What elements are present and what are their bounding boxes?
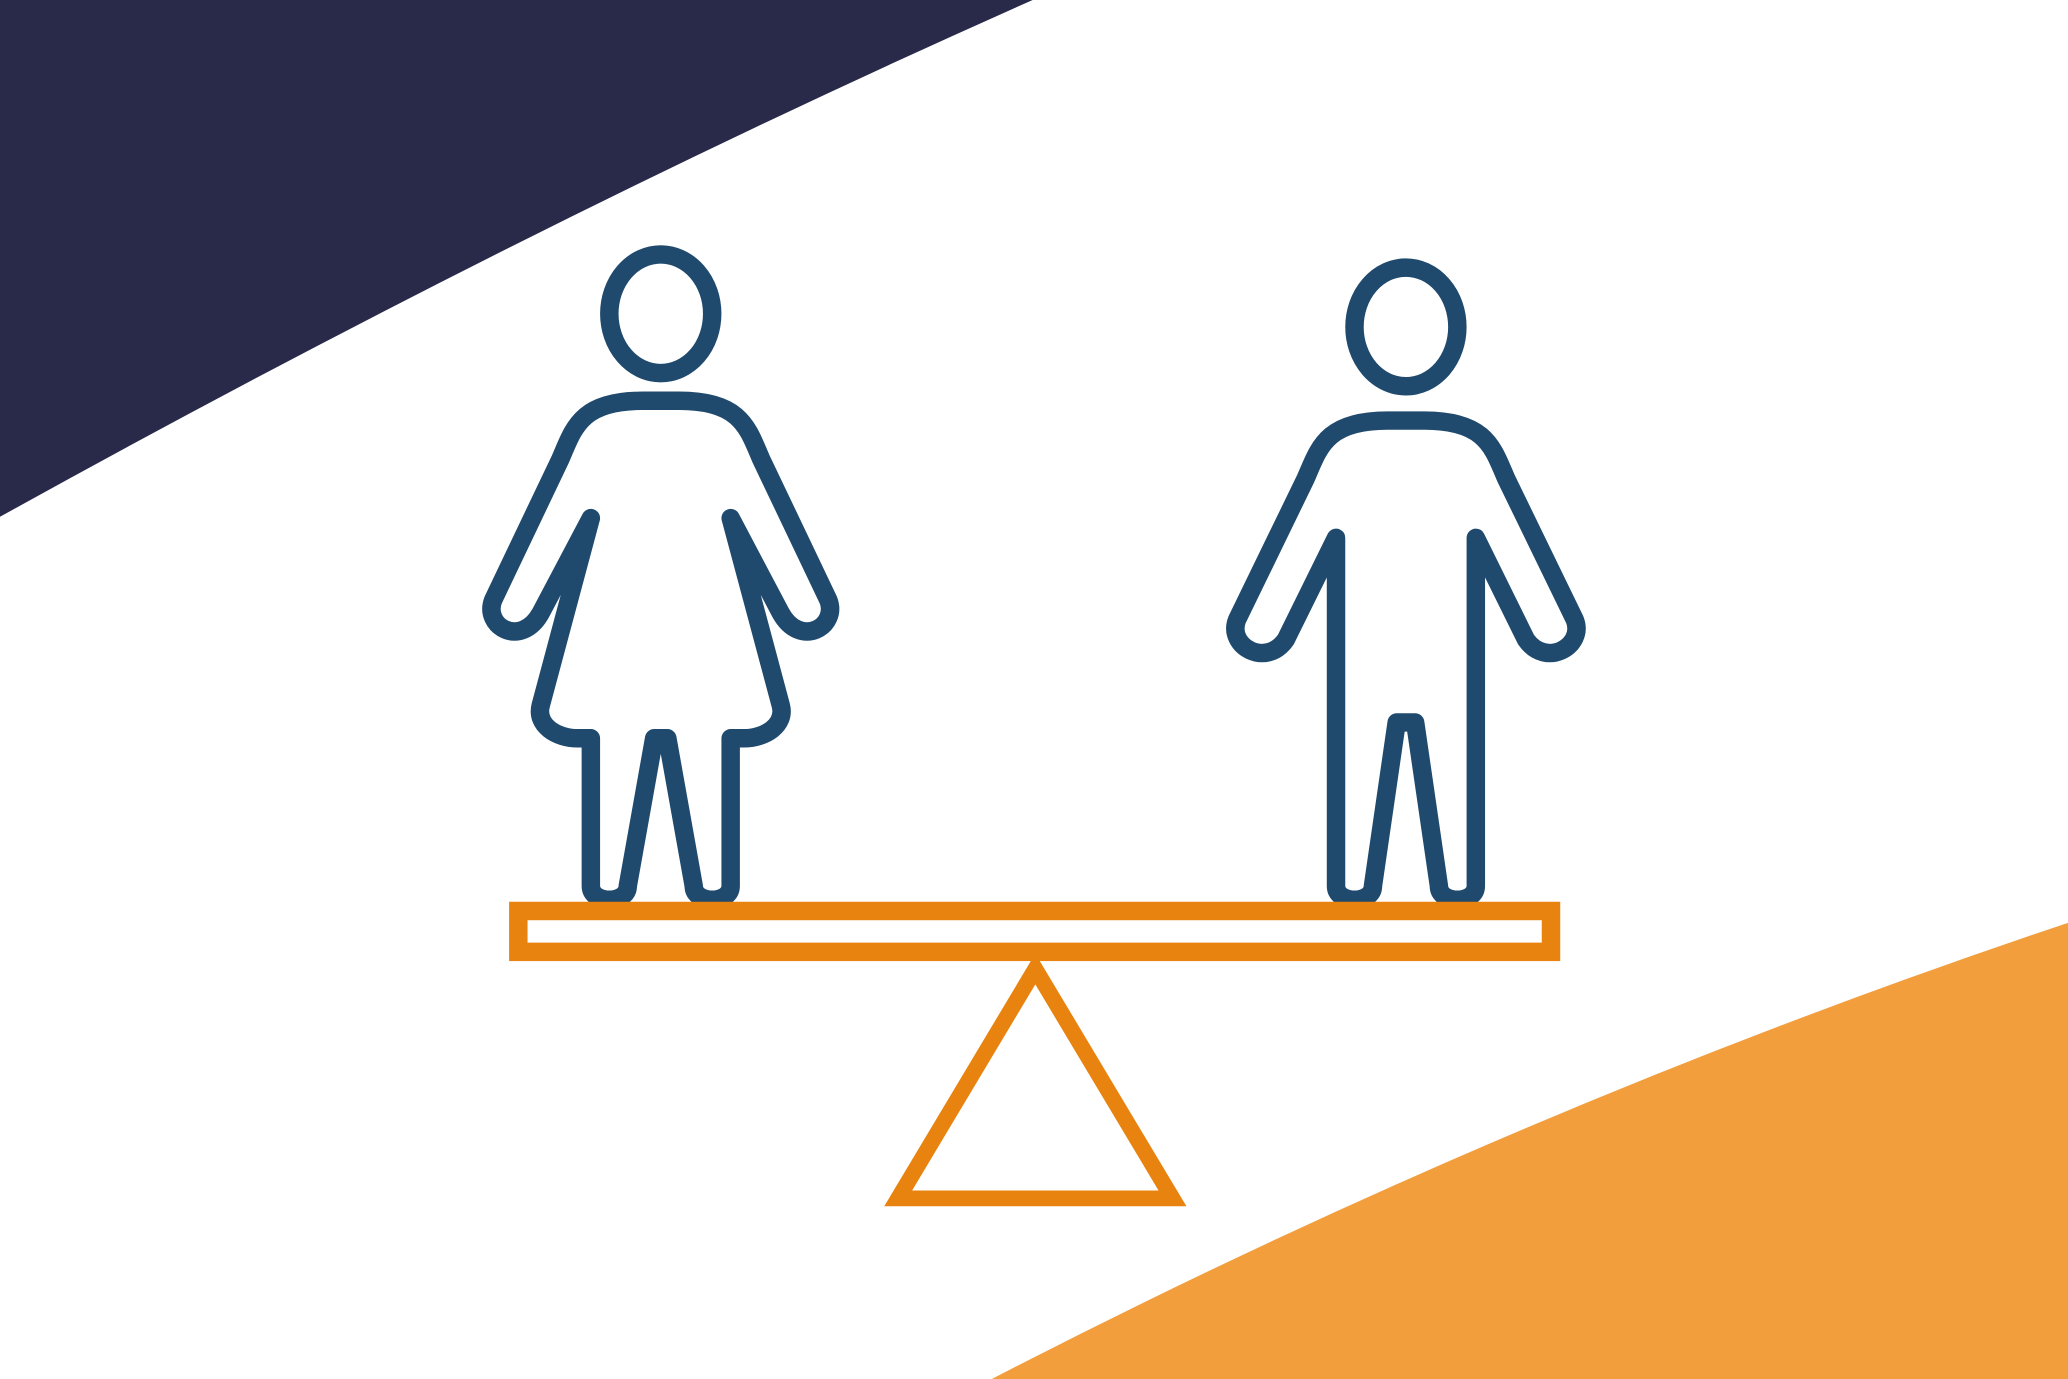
background shape: navy top-left: [0, 0, 1033, 517]
icon: seesaw: [518, 911, 1551, 1198]
background shape: orange bottom-right: [992, 923, 2068, 1379]
icon: woman figure: [491, 254, 830, 900]
icon: man figure: [1235, 268, 1576, 900]
